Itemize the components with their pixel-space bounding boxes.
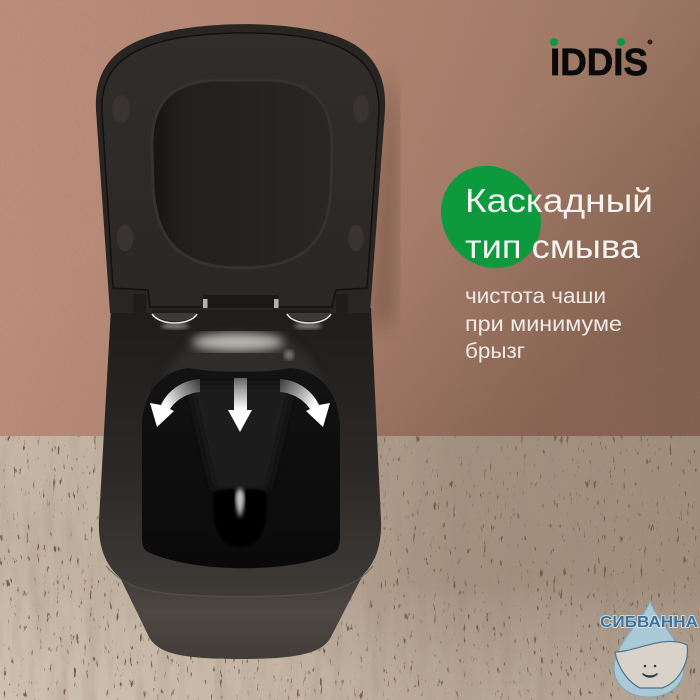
subheading: при минимуме	[465, 313, 622, 336]
heading	[465, 182, 653, 265]
left hinge cap	[152, 313, 197, 329]
bowl lower body	[114, 565, 368, 659]
logo dot two	[617, 38, 625, 46]
drain highlight	[235, 488, 245, 518]
left metal hinge pin	[203, 299, 208, 308]
subheading: чистота чаши	[465, 285, 606, 308]
bathtub	[615, 641, 688, 688]
shroud side highlight	[284, 350, 294, 360]
arrow: centre down	[228, 378, 252, 432]
wall background	[0, 0, 700, 437]
bowl rim	[99, 308, 381, 597]
heading: Каскадный	[465, 182, 653, 219]
seat recess	[152, 80, 332, 268]
bottom right bumper	[348, 225, 364, 251]
bottom left bumper	[116, 225, 134, 251]
lid outer edge	[96, 24, 385, 313]
front shroud highlight	[192, 333, 284, 351]
lid shadow on wall	[372, 70, 398, 325]
bowl interior	[142, 368, 340, 568]
right hinge post	[336, 294, 348, 313]
hinge bar	[203, 295, 278, 308]
right hinge cap	[287, 313, 331, 329]
right metal hinge pin	[274, 299, 278, 308]
arrow: left curve	[150, 379, 200, 427]
subheading	[465, 285, 622, 363]
heading: тип смыва	[465, 228, 641, 265]
green accent blob	[421, 146, 561, 288]
lid face	[102, 33, 379, 307]
logo: IDDIS: IDDIS	[550, 42, 648, 84]
stone floor	[0, 436, 700, 700]
registered mark	[648, 40, 652, 44]
toilet lid	[96, 24, 385, 313]
flush arrows	[150, 378, 330, 432]
drain opening	[213, 489, 267, 547]
logo dot one	[550, 38, 558, 46]
interior central slope	[190, 385, 292, 490]
subheading: брызг	[465, 340, 525, 363]
arrow: right curve	[280, 379, 330, 427]
rim edge highlight	[106, 566, 373, 597]
watermark text: СИБВАННА	[600, 614, 698, 631]
top left bumper	[112, 95, 130, 123]
top right bumper	[353, 95, 369, 123]
shroud dome	[160, 332, 324, 395]
watermark: Sibvanna	[600, 600, 698, 697]
bathtub face	[642, 665, 658, 678]
left hinge post	[133, 294, 146, 313]
water drop	[614, 600, 684, 697]
toilet bowl	[99, 308, 381, 659]
